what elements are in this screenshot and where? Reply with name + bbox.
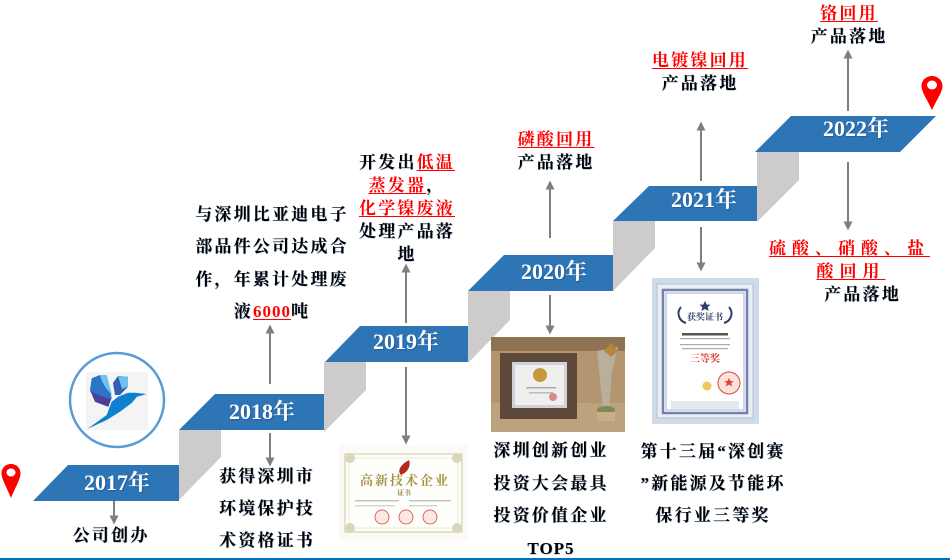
text: 2022 lower products bbox=[769, 239, 930, 304]
arrow: 2020 up bbox=[549, 185, 551, 238]
bottom rule bbox=[0, 558, 950, 560]
year label: 2020: 2020年 bbox=[521, 259, 587, 284]
image: third prize certificate: 获奖证书 bbox=[687, 311, 724, 322]
band: 2017 bbox=[33, 465, 179, 501]
image: award plaque photo bbox=[491, 337, 625, 432]
text: 2019 products: 蒸发器， bbox=[369, 176, 445, 195]
text: 2020 product: 磷酸回用 bbox=[518, 130, 594, 149]
text: 2021 product bbox=[652, 51, 748, 93]
text: 2018 certificate: 获得深圳市 bbox=[219, 467, 315, 486]
arrow: 2018 down bbox=[269, 433, 271, 462]
image: third prize certificate: 三等奖 bbox=[690, 352, 720, 365]
text: 2021 product: 电镀镍回用 bbox=[652, 51, 748, 70]
band: 2019 bbox=[325, 326, 468, 362]
arrow: 2017 down bbox=[113, 501, 115, 520]
text: 2020 award bbox=[493, 441, 609, 558]
band: 2021 bbox=[613, 186, 757, 221]
text: 2021 award: 保行业三等奖 bbox=[655, 506, 771, 525]
icon: end location pin bbox=[922, 76, 942, 110]
text: 2021 award: ”新能源及节能环 bbox=[640, 474, 786, 493]
text: 2021 product: 产品落地 bbox=[662, 74, 738, 93]
image: high-tech enterprise certificate: 证书 bbox=[397, 488, 412, 497]
arrow: 2019 up bbox=[405, 268, 407, 323]
arrow: 2020 down bbox=[549, 295, 551, 330]
text: 2018 BYD cooperation: 与深圳比亚迪电子 bbox=[195, 205, 349, 224]
year label: 2022: 2022年 bbox=[823, 116, 889, 141]
image: high-tech enterprise certificate bbox=[339, 445, 468, 541]
text: 2019 products: 处理产品落 bbox=[359, 222, 455, 241]
text: 2018 BYD cooperation bbox=[195, 205, 349, 321]
text: 2018 certificate bbox=[219, 467, 315, 550]
year label: 2021: 2021年 bbox=[671, 187, 737, 212]
image: third prize certificate bbox=[652, 278, 759, 424]
text: 2018 certificate: 术资格证书 bbox=[219, 531, 315, 550]
step: 2017 riser bbox=[179, 430, 221, 500]
band: 2018 bbox=[179, 394, 324, 430]
text: 2020 award: 投资价值企业 bbox=[493, 506, 609, 525]
text: 2020 award: 深圳创新创业 bbox=[493, 441, 609, 460]
text: 2019 products: 化学镍废液 bbox=[359, 199, 455, 218]
text: 2019 products: 开发出低温 bbox=[359, 153, 455, 172]
step: 2019 riser bbox=[468, 291, 510, 363]
text: 2022 lower products: 产品落地 bbox=[824, 285, 901, 304]
arrow: 2019 down bbox=[405, 367, 407, 440]
text: 2020 award: 投资大会最具 bbox=[493, 474, 609, 492]
text: 2019 products: 地 bbox=[397, 245, 417, 264]
text: 2022 upper product: 铬回用 bbox=[820, 4, 878, 23]
step: 2018 riser bbox=[324, 362, 366, 432]
icon: start location pin bbox=[2, 464, 20, 498]
step: 2020 riser bbox=[613, 221, 655, 291]
arrow: 2022 up bbox=[847, 54, 849, 111]
arrow: 2022 down bbox=[847, 162, 849, 226]
text: 2018 BYD cooperation: 液6000吨 bbox=[234, 302, 310, 321]
icon: company logo bbox=[68, 352, 166, 448]
arrow: 2021 up bbox=[700, 126, 702, 181]
text: 2018 BYD cooperation: 部品件公司达成合 bbox=[195, 237, 349, 256]
year label: 2018: 2018年 bbox=[229, 399, 295, 424]
text: 2021 award bbox=[640, 442, 786, 525]
text: 2018 BYD cooperation: 作，年累计处理废 bbox=[195, 270, 349, 289]
year label: 2019: 2019年 bbox=[373, 329, 439, 354]
text: 2021 award: 第十三届“深创赛 bbox=[640, 442, 786, 461]
text: 2022 upper product bbox=[811, 4, 887, 46]
text: 2022 lower products: 酸回用 bbox=[816, 262, 886, 281]
text: 2017 milestone: 公司创办 bbox=[73, 526, 149, 545]
text: 2019 products bbox=[359, 153, 455, 264]
text: 2020 product bbox=[518, 130, 594, 172]
text: 2020 award: TOP5 bbox=[527, 538, 575, 558]
text: 2022 upper product: 产品落地 bbox=[811, 27, 887, 46]
image: high-tech enterprise certificate: 高新技术企业 bbox=[360, 473, 448, 488]
year label: 2017: 2017年 bbox=[84, 470, 150, 495]
arrow: 2018 up bbox=[269, 329, 271, 384]
text: 2018 certificate: 环境保护技 bbox=[219, 499, 315, 518]
step: 2021 riser bbox=[757, 152, 799, 222]
arrow: 2021 down bbox=[700, 227, 702, 267]
band: 2022 bbox=[755, 116, 936, 152]
text: 2022 lower products: 硫酸、硝酸、盐 bbox=[769, 239, 930, 258]
band: 2020 bbox=[468, 255, 613, 291]
text: 2020 product: 产品落地 bbox=[518, 152, 594, 172]
